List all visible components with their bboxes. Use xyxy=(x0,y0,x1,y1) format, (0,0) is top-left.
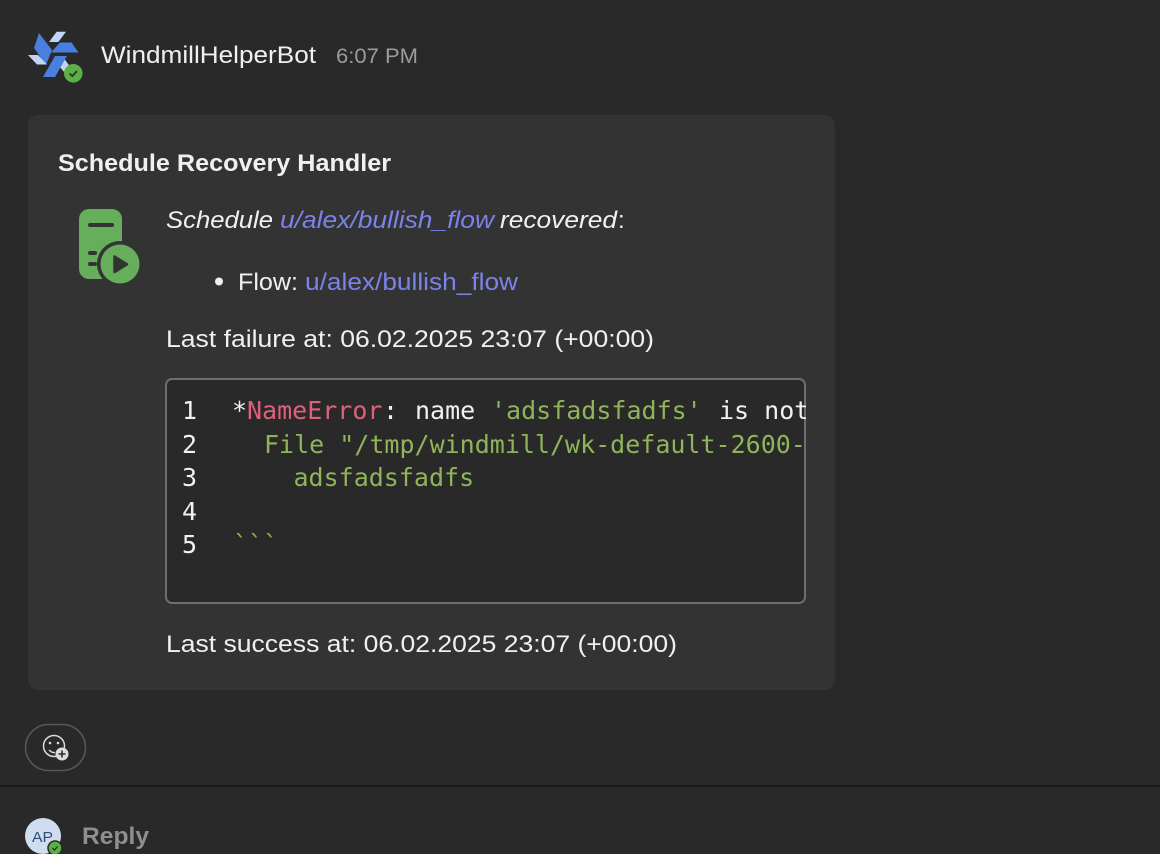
text: schedule recovered line: : xyxy=(618,207,625,234)
avatar: AP xyxy=(32,829,53,846)
code text: name xyxy=(415,396,475,425)
text: schedule recovered line xyxy=(166,207,625,234)
reaction button xyxy=(26,724,86,770)
text: flow bullet: Flow: xyxy=(238,269,298,296)
code text: : xyxy=(383,396,398,425)
timestamp: 6:07 PM xyxy=(336,45,418,68)
text: schedule recovered line: u/alex/bullish_flow xyxy=(280,207,496,234)
code text: 'adsfadsfadfs' xyxy=(491,396,702,425)
reply label: Reply xyxy=(82,823,150,850)
line numbers: 5 xyxy=(182,530,197,559)
reply bar xyxy=(25,818,150,854)
text: schedule recovered line: recovered xyxy=(500,207,618,234)
icon: windmill logo with status badge xyxy=(28,32,83,83)
text: schedule recovered line: Schedule xyxy=(166,207,273,234)
code text: NameError xyxy=(247,396,382,425)
text: last success: Last success at: 06.02.2025 23:07 (+00:00) xyxy=(166,631,677,658)
divider xyxy=(0,785,1160,787)
text: flow bullet xyxy=(215,269,519,296)
line numbers: 3 xyxy=(182,463,197,492)
line numbers: 1 xyxy=(182,396,197,425)
text: flow bullet: u/alex/bullish_flow xyxy=(305,269,519,296)
code text: is not xyxy=(719,396,809,425)
panel: code block xyxy=(166,379,809,603)
heading: Schedule Recovery Handler xyxy=(58,150,391,177)
code text: * xyxy=(232,396,247,425)
line numbers xyxy=(182,396,197,559)
line numbers: 2 xyxy=(182,430,197,459)
text: last failure: Last failure at: 06.02.2025 23:07 (+00:00) xyxy=(166,326,654,353)
message header xyxy=(28,32,418,83)
icon: server with play button xyxy=(79,209,143,287)
code text xyxy=(234,400,806,538)
bot name: WindmillHelperBot xyxy=(101,42,316,69)
panel: message card xyxy=(28,115,835,690)
code text: ``` xyxy=(233,530,278,559)
code text: File "/tmp/windmill/wk-default-2600- xyxy=(264,430,806,459)
line numbers: 4 xyxy=(182,497,197,526)
code text: adsfadsfadfs xyxy=(294,463,474,492)
icon: add reaction smiley xyxy=(44,736,68,760)
